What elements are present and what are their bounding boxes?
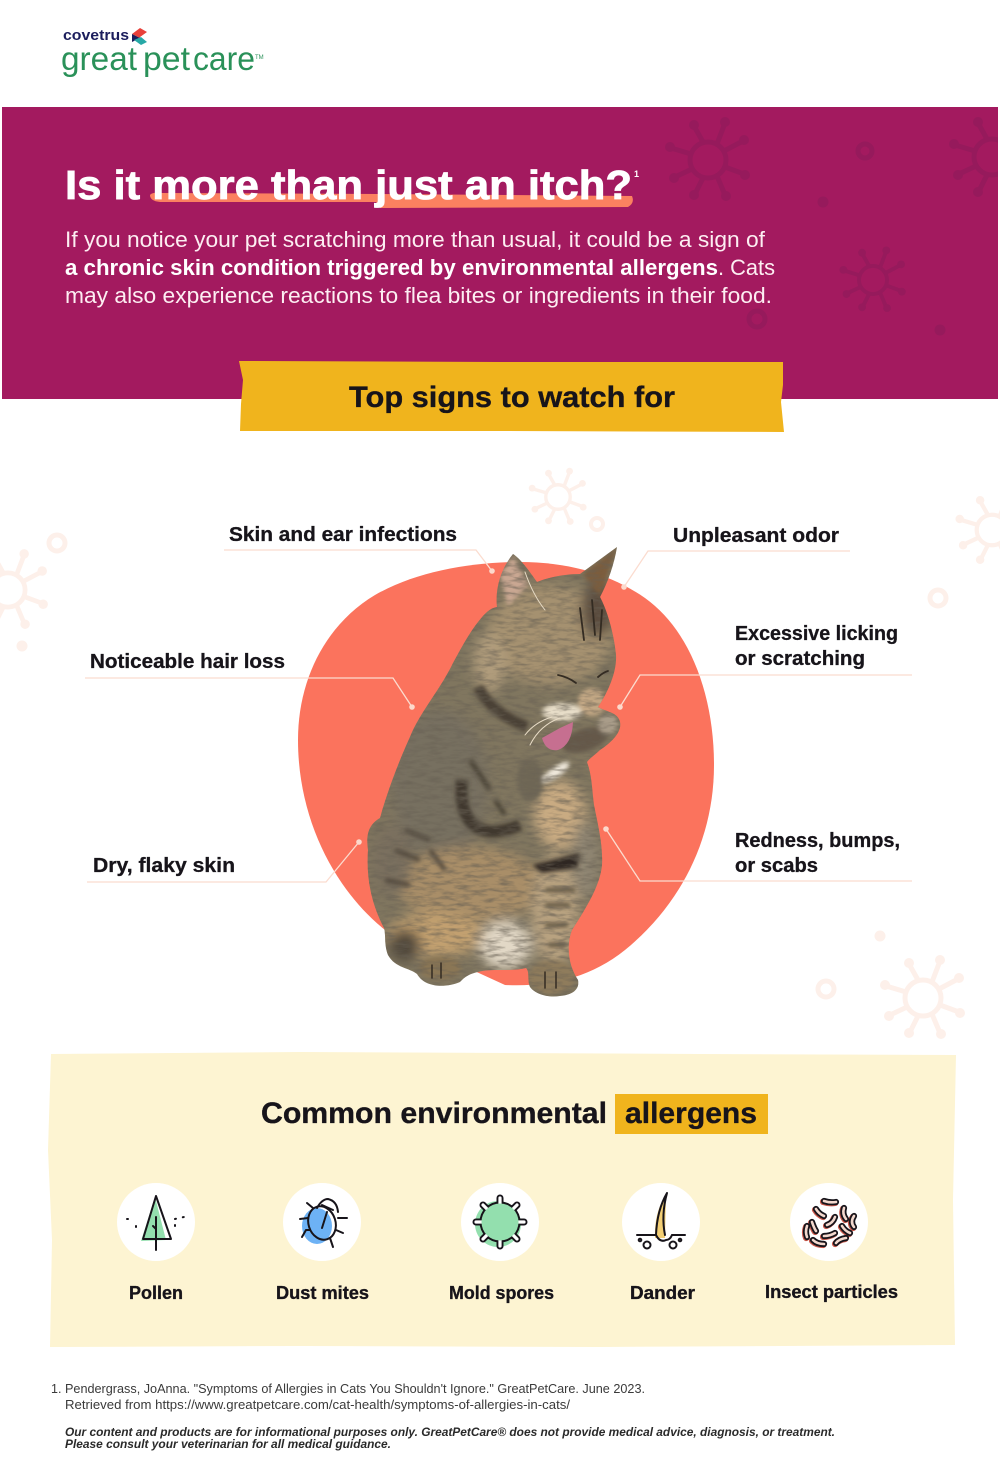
callout: redness, bumps, or scabs: or scabs — [735, 855, 818, 877]
title underline brush — [150, 193, 633, 208]
footnote reference: Retrieved from https://www.greatpetcare.com/cat-health/symptoms-of-allergies-in-cats/ — [65, 1398, 571, 1412]
intro paragraph: . Cats — [718, 255, 775, 280]
intro paragraph: may also experience reactions to flea bites or ingredients in their food. — [65, 283, 772, 308]
callout: unpleasant odor: Unpleasant odor — [673, 525, 839, 547]
callout: redness, bumps, or scabs: Redness, bumps, — [735, 830, 900, 852]
label: pollen: Pollen — [129, 1283, 183, 1303]
footnote reference: 1. — [51, 1382, 61, 1396]
label: dander: Dander — [630, 1283, 695, 1303]
title: Is it more than just an itch? — [65, 162, 632, 208]
label: mold spores: Mold spores — [449, 1283, 554, 1303]
banner heading: Top signs to watch for — [349, 381, 675, 414]
callout: dry, flaky skin — [87, 839, 362, 882]
icon: mold spore — [461, 1183, 539, 1261]
panel: header — [2, 107, 1000, 399]
icon: dander hair follicle — [622, 1183, 700, 1261]
logo: covetrus wordmark: covetrus — [63, 27, 129, 44]
callout: dry, flaky skin: Dry, flaky skin — [93, 855, 235, 877]
footnote reference — [51, 1382, 645, 1412]
legal disclaimer: Please consult your veterinarian for all medical guidance. — [65, 1437, 391, 1451]
callout: noticeable hair loss: Noticeable hair loss — [90, 651, 285, 673]
icon: insect particles — [790, 1183, 868, 1261]
panel: common environmental allergens — [48, 1052, 956, 1347]
callout: skin and ear infections: Skin and ear infections — [229, 524, 457, 546]
banner: top signs — [239, 361, 784, 432]
legal disclaimer — [65, 1425, 835, 1451]
coral blob behind cat — [298, 562, 714, 985]
logo: great pet care wordmark: great — [61, 40, 137, 77]
logo — [61, 27, 264, 77]
logo: great pet care wordmark — [61, 40, 255, 77]
allergens heading — [261, 1094, 768, 1134]
callout: excessive licking or scratching — [617, 623, 912, 710]
callout: excessive licking or scratching: Excessive licking — [735, 623, 898, 645]
cat tongue — [542, 722, 573, 750]
callout: excessive licking or scratching: or scratching — [735, 648, 865, 670]
intro paragraph — [65, 227, 775, 308]
allergens heading: Common environmental — [261, 1097, 607, 1130]
allergens heading: allergens — [625, 1097, 757, 1130]
icon: dust mite — [283, 1183, 361, 1261]
label: dust mites: Dust mites — [276, 1283, 369, 1303]
footnote reference: Pendergrass, JoAnna. "Symptoms of Allergies in Cats You Shouldn't Ignore." GreatPetCare. June 2023. — [65, 1382, 645, 1396]
intro paragraph: If you notice your pet scratching more than usual, it could be a sign of — [65, 227, 766, 252]
callout: redness, bumps, or scabs — [603, 826, 912, 881]
logo: great pet care wordmark: care — [193, 40, 255, 77]
icon: pollen tree — [117, 1183, 195, 1261]
intro paragraph: a chronic skin condition triggered by environmental allergens — [65, 255, 718, 280]
icon: covetrus mark — [132, 28, 147, 45]
legal disclaimer: Our content and products are for informational purposes only. GreatPetCare® does not provide medical advice, diagnosis, or treatment. — [65, 1425, 835, 1439]
header background virus pattern — [665, 114, 1000, 336]
cat ear edge and whiskers — [525, 572, 560, 745]
background virus decoration — [0, 468, 1000, 1039]
callout: skin and ear infections — [224, 524, 495, 574]
logo: trademark: TM — [255, 55, 264, 61]
cat closed eyes and stripes — [432, 600, 608, 988]
title footnote marker: 1 — [634, 169, 639, 179]
callout: noticeable hair loss — [85, 651, 415, 710]
photo: cat licking paw — [360, 540, 630, 1000]
label: insect particles: Insect particles — [765, 1282, 898, 1302]
logo: great pet care wordmark: pet — [143, 40, 190, 77]
callout: unpleasant odor — [621, 525, 850, 590]
